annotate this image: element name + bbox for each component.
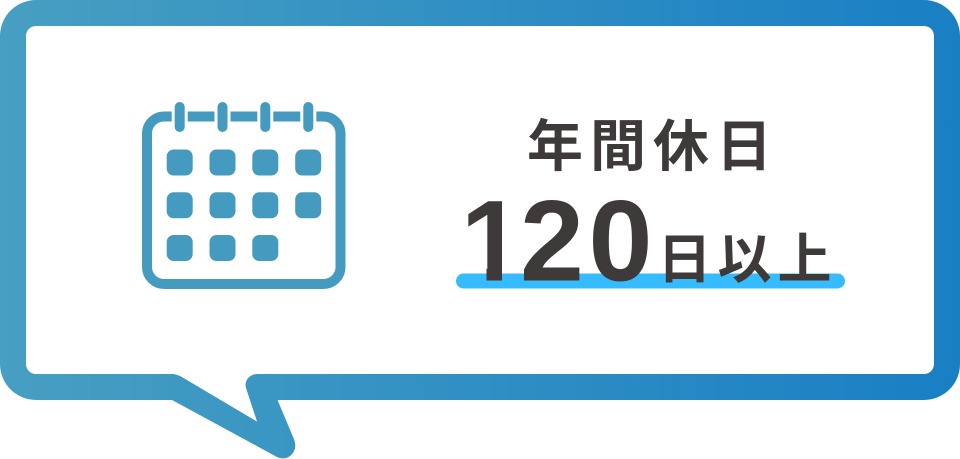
calendar day squares xyxy=(167,150,321,261)
figure: 120: 1 xyxy=(460,178,524,306)
icon: calendar xyxy=(147,100,340,284)
highlight underline xyxy=(456,274,845,288)
unit: days or more: 日以上 xyxy=(658,230,838,290)
figure: 120: 20 xyxy=(520,178,652,306)
calendar rings xyxy=(173,100,315,134)
calendar outline xyxy=(147,116,340,284)
heading: annual holidays: 年間休日 xyxy=(527,115,779,178)
figure: 120 xyxy=(468,200,648,282)
